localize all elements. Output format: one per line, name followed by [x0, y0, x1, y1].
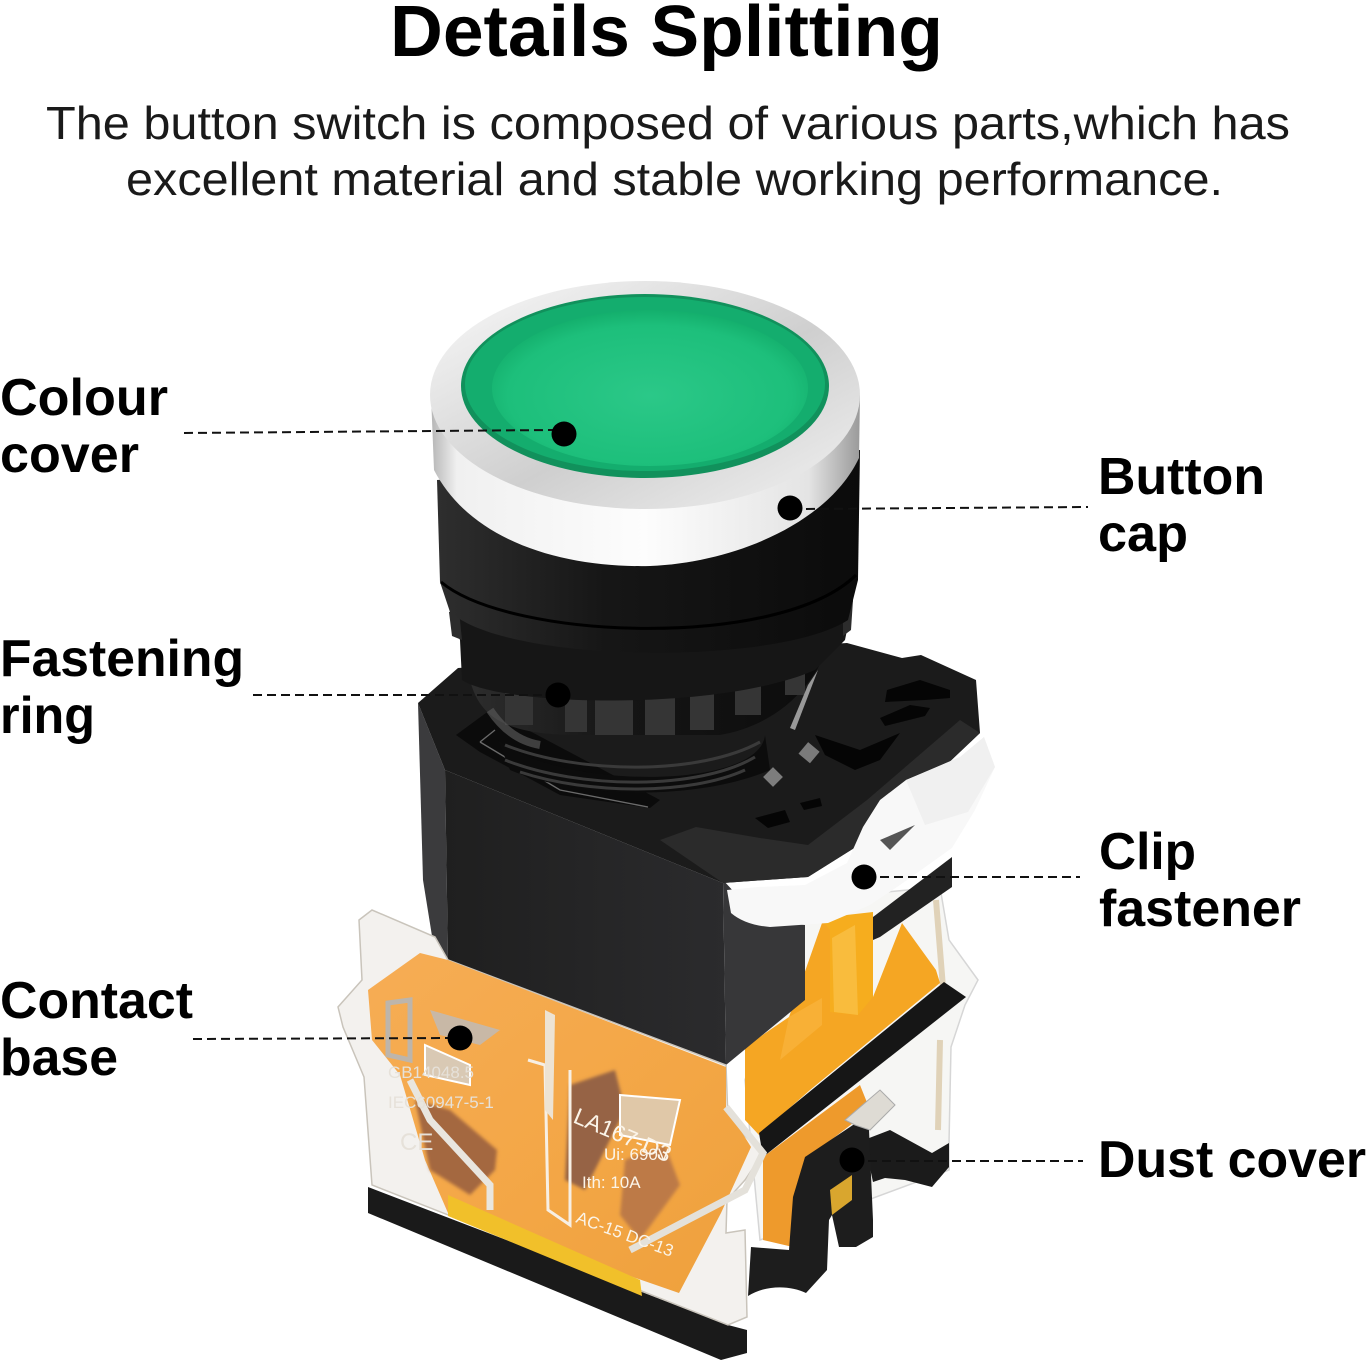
orange insert	[368, 953, 751, 1293]
yellow bottom tab	[448, 1195, 642, 1296]
contact base front	[338, 910, 763, 1360]
callout: clip fastener: Clip	[1099, 823, 1196, 881]
push button switch product illustration	[338, 281, 995, 1360]
body right face	[723, 880, 805, 1065]
callout: dust cover: Dust cover	[1098, 1131, 1366, 1189]
fastening ring	[462, 620, 835, 792]
callout: fastening ring: Fastening	[0, 630, 244, 688]
orange strip below divider	[763, 1085, 870, 1247]
black mounting body	[418, 643, 980, 1065]
clear plate	[338, 910, 763, 1325]
body front face	[445, 770, 726, 1065]
brown internal parts	[415, 1070, 680, 1240]
callout: contact base: base	[0, 1029, 118, 1087]
silver button cap	[430, 281, 860, 566]
callout: contact base: Contact	[0, 972, 193, 1030]
yellow tab	[820, 912, 873, 1015]
printed markings: IEC60947-5-1	[388, 1093, 494, 1112]
printed markings: Ith: 10A	[582, 1173, 641, 1192]
subtitle text: The button switch is composed of various parts,which has	[46, 97, 1290, 149]
callout: dust cover	[840, 1131, 1366, 1189]
callout: contact base	[0, 972, 472, 1087]
printed markings: Ui: 690V	[604, 1145, 670, 1164]
metal contacts	[388, 1000, 410, 1060]
callout: colour cover	[0, 369, 576, 484]
callout: clip fastener: fastener	[1099, 880, 1301, 938]
printed markings: LA167-D3	[570, 1103, 676, 1167]
green colour cover	[465, 297, 825, 471]
subtitle text: excellent material and stable working performance.	[126, 153, 1223, 205]
slots in deck	[885, 680, 950, 702]
right clear side plate	[745, 887, 978, 1240]
collar tabs	[449, 600, 853, 640]
subtitle text	[46, 97, 1290, 205]
callout: button cap: cap	[1098, 505, 1188, 563]
callout: button cap: Button	[1098, 448, 1265, 506]
dark block below clip	[873, 857, 952, 940]
body side chamfer	[418, 703, 448, 960]
black base plate	[368, 1187, 747, 1360]
printed markings	[388, 1063, 676, 1261]
clear latches	[410, 1080, 490, 1210]
center divider slot	[528, 1060, 570, 1225]
orange internal side	[745, 917, 940, 1135]
dust cover base, right side	[748, 1090, 949, 1296]
printed markings: AC-15 DC-13	[574, 1208, 676, 1261]
callout: colour cover: cover	[0, 426, 139, 484]
black divider strip	[759, 982, 966, 1157]
body top deck	[418, 643, 980, 883]
callout: fastening ring: ring	[0, 687, 95, 745]
callout: button cap	[778, 448, 1265, 563]
callout: fastening ring	[0, 630, 570, 745]
black cap body	[437, 450, 860, 653]
clip fastener	[727, 737, 995, 927]
printed markings: CE	[400, 1129, 433, 1156]
black dust cover legs	[748, 1123, 873, 1296]
printed markings: GB14048.5	[388, 1063, 474, 1082]
lower black collar	[449, 600, 853, 701]
callout: colour cover: Colour	[0, 369, 168, 427]
callout: clip fastener	[852, 823, 1301, 938]
right wing of base	[864, 1130, 949, 1187]
